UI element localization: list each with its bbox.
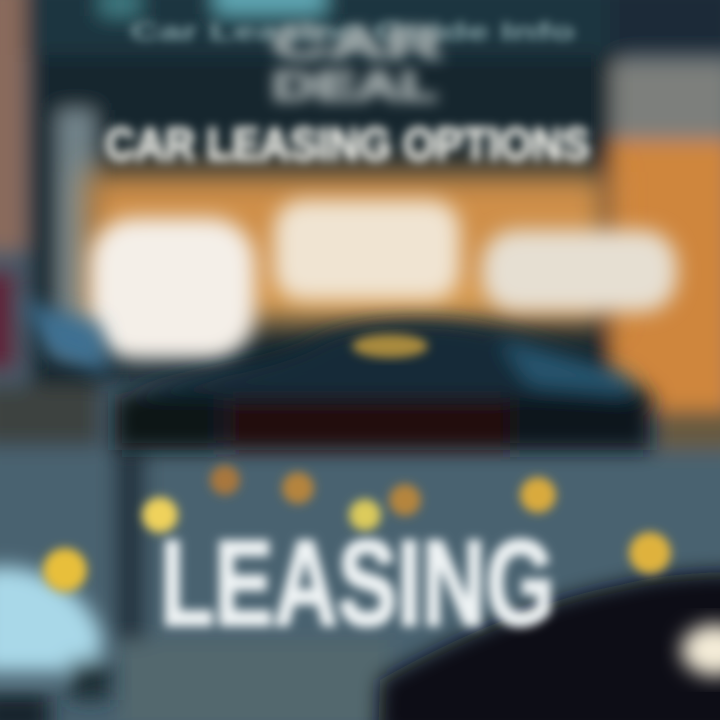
icon: car, dark sedan — [22, 300, 655, 450]
blurred heading text: CAR — [272, 19, 442, 68]
blurred heading text: DEAL — [272, 62, 437, 109]
blurred heading text — [105, 18, 590, 170]
blurred heading text: CAR LEASING OPTIONS — [105, 118, 590, 170]
car windscreen highlight — [352, 334, 428, 358]
card left — [90, 218, 255, 360]
orange sign panel — [85, 172, 610, 322]
icon: blue car, bottom left — [0, 566, 110, 720]
yellow location dots — [43, 465, 671, 592]
icon: black car, bottom right — [378, 572, 720, 720]
card centre — [274, 200, 460, 300]
panel: white info cards — [90, 200, 677, 360]
heading: LEASING: LEASING — [160, 515, 555, 651]
headlight — [681, 624, 720, 676]
blurred heading text: Car Leasing Guide Info — [130, 18, 575, 46]
card right — [482, 230, 677, 312]
